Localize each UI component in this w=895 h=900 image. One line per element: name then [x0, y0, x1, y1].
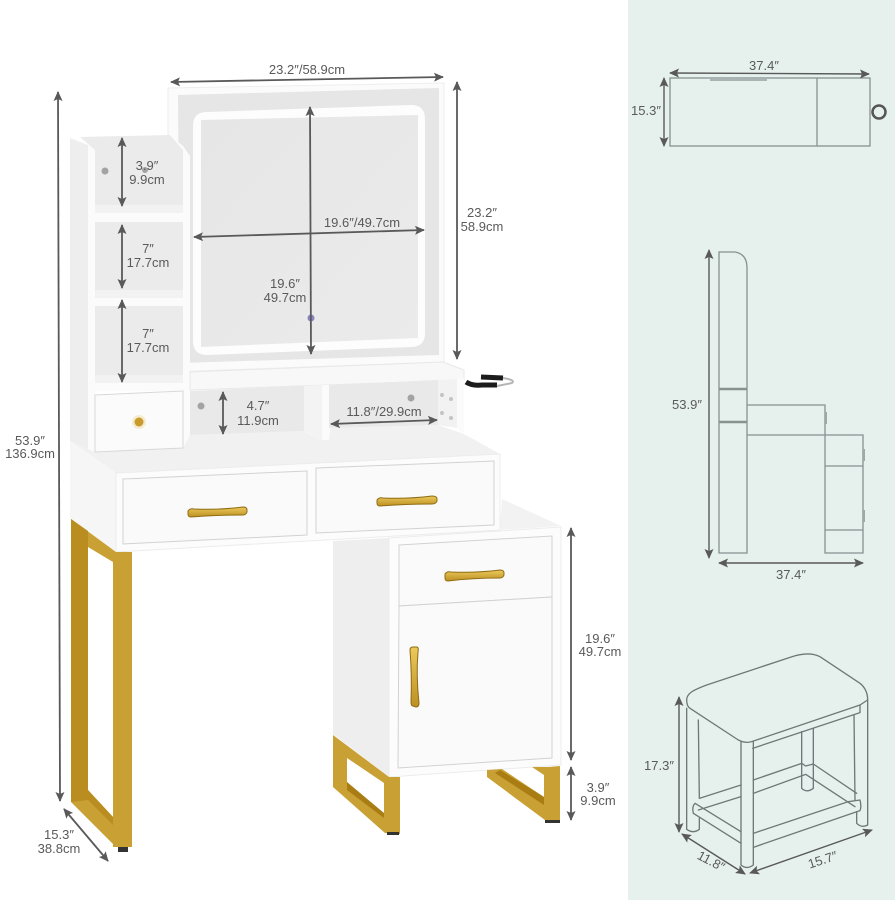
top view diagram: 37.4″	[749, 58, 779, 73]
left gold leg	[71, 519, 132, 852]
dimension: middle shelf: 17.7cm	[127, 255, 169, 270]
cabinet right gold leg	[487, 766, 560, 823]
dimension: mirror full height: 23.2″	[467, 205, 497, 220]
dimension: cabinet height: 19.6″	[585, 631, 615, 646]
dimension: middle shelf	[122, 225, 169, 288]
power cord	[466, 377, 513, 386]
dimension: leg height: 9.9cm	[580, 793, 616, 808]
dimension: top shelf: 3.9″	[136, 158, 159, 173]
dimension: mirror glass width	[194, 215, 424, 237]
dimension: total height	[5, 92, 60, 801]
dimension: mirror glass height	[264, 107, 311, 354]
dimension: top shelf: 9.9cm	[129, 172, 165, 187]
dimension: depth	[38, 809, 108, 861]
dimension: total height: 136.9cm	[5, 446, 55, 461]
dimension: total height: 53.9″	[15, 433, 45, 448]
desk side panel	[70, 441, 116, 552]
cabinet drawer	[399, 536, 552, 606]
dimension: right compartment width: 11.8″/29.9cm	[346, 404, 422, 419]
dimension: middle shelf: 7″	[142, 241, 154, 256]
dimension: right compartment width	[331, 404, 437, 424]
dimension: top shelf	[122, 138, 165, 206]
dimension: left compartment height	[223, 392, 279, 434]
left desk drawer	[123, 471, 307, 544]
dimension: depth: 38.8cm	[38, 841, 80, 856]
stool diagram: 17.3″	[644, 758, 674, 773]
dimension: left compartment height: 4.7″	[247, 398, 270, 413]
cabinet left gold leg	[333, 735, 400, 835]
side view diagram: 53.9″	[672, 397, 702, 412]
dimension: depth: 15.3″	[44, 827, 74, 842]
dimension: mirror full height: 58.9cm	[461, 219, 503, 234]
cabinet top surface	[500, 499, 561, 530]
dimension: mirror width	[171, 62, 443, 82]
dimension: mirror glass height: 49.7cm	[264, 290, 306, 305]
lower hutch compartments	[190, 362, 464, 440]
dimension: mirror glass width: 19.6″/49.7cm	[324, 215, 400, 230]
dimension: mirror glass height: 19.6″	[270, 276, 300, 291]
desk front with drawers	[116, 454, 500, 552]
dimension: cabinet height	[571, 528, 621, 760]
right side panel background	[628, 0, 895, 900]
stool diagram	[644, 654, 872, 875]
side view diagram: 37.4″	[776, 567, 806, 582]
right desk drawer	[316, 461, 494, 533]
dimension: mirror width: 23.2″/58.9cm	[269, 62, 345, 77]
stool diagram: 11.8″	[695, 848, 728, 875]
dimension: left compartment height: 11.9cm	[237, 413, 279, 428]
top view diagram	[631, 58, 886, 146]
stool diagram: 15.7″	[806, 848, 840, 871]
hutch shelf unit	[70, 135, 190, 452]
vanity desk illustration	[70, 83, 561, 852]
stool line art	[687, 654, 868, 867]
dimension: mirror full height	[457, 82, 503, 359]
small hutch drawer	[95, 391, 183, 452]
dimension: cabinet height: 49.7cm	[579, 644, 621, 659]
desk top surface	[70, 425, 500, 473]
top view diagram: 15.3″	[631, 103, 661, 118]
dimension: lower shelf	[122, 300, 169, 382]
dimension: leg height	[571, 767, 616, 820]
dimension: lower shelf: 17.7cm	[127, 340, 169, 355]
side view diagram	[672, 250, 865, 582]
dimension: lower shelf: 7″	[142, 326, 154, 341]
cabinet side	[333, 538, 389, 777]
cabinet door	[398, 597, 552, 768]
mirror frame	[168, 83, 444, 372]
cabinet front	[389, 527, 561, 777]
dimension: leg height: 3.9″	[587, 780, 610, 795]
